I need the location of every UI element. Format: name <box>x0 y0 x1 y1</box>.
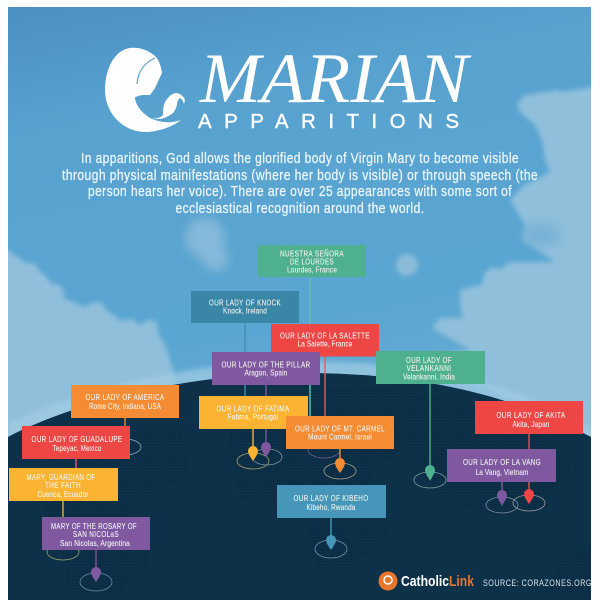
label: Fatima <box>199 396 308 429</box>
cloud: left <box>8 248 176 437</box>
intro paragraph <box>62 151 538 217</box>
label: San Nicolas: San Nicolas, Argentina <box>60 539 130 548</box>
label: Lourdes <box>258 245 366 277</box>
label: Guadalupe: Tepeyac, Mexico <box>52 444 102 453</box>
label: La Salette: OUR LADY OF LA SALETTE <box>280 332 370 340</box>
label: Pillar: Aragon, Spain <box>244 368 288 378</box>
label: Kibeho: Kibeho, Rwanda <box>306 503 356 512</box>
label: Pillar <box>212 352 320 385</box>
label: Guardian of the Faith: THE FAITH <box>45 481 81 490</box>
label: Guardian of the Faith: Cuenca, Ecuador <box>38 490 89 499</box>
label: Knock: OUR LADY OF KNOCK <box>209 298 281 308</box>
logo: Mary and child <box>105 48 185 132</box>
label: La Vang <box>447 449 556 482</box>
label: Lourdes: NUESTRA SEÑORA <box>280 250 344 258</box>
CatholicLink logo: CatholicLink <box>401 573 475 590</box>
CatholicLink logo <box>378 572 475 590</box>
intro paragraph: ecclesiastical recognition around the world. <box>176 201 424 217</box>
label: America: OUR LADY OF AMERICA <box>86 393 165 402</box>
title: MARIAN: MARIAN <box>199 40 472 118</box>
label: La Salette <box>271 324 379 356</box>
label: Knock <box>191 291 299 323</box>
label: Akita: OUR LADY OF AKITA <box>496 411 566 420</box>
label: Guadalupe: OUR LADY OF GUADALUPE <box>32 435 122 444</box>
map pins <box>91 442 534 582</box>
label: Akita: Akita, Japan <box>512 420 550 429</box>
location rings <box>47 439 545 591</box>
background: sky with clouds <box>8 7 591 437</box>
label: Pillar: OUR LADY OF THE PILLAR <box>222 360 310 370</box>
cloud shadow patch <box>520 223 560 247</box>
cloud: small right <box>396 254 418 276</box>
earth with dotted map <box>8 373 600 600</box>
label: Fatima: Fatima, Portugal <box>228 412 279 422</box>
label: La Vang: OUR LADY OF LA VANG <box>463 458 541 467</box>
label: Guadalupe <box>22 426 130 459</box>
label: Guardian of the Faith: MARY, GUARDIAN OF <box>26 473 96 482</box>
label: Kibeho: OUR LADY OF KIBEHO <box>294 494 368 503</box>
label: Velankanni <box>376 351 485 384</box>
label: America <box>71 385 179 418</box>
atmosphere glow <box>8 359 590 436</box>
label: Mt. Carmel: Mount Carmel, Israel <box>308 432 372 442</box>
label: Lourdes: DE LOURDES <box>290 258 334 266</box>
label: San Nicolas <box>42 517 150 550</box>
label: La Salette: La Salette, France <box>298 340 353 348</box>
cloud: right <box>432 85 591 437</box>
label: America: Rome City, Indiana, USA <box>89 402 161 411</box>
label: San Nicolas: SAN NICOLaS <box>73 530 119 539</box>
label: Lourdes: Lourdes, France <box>287 266 337 274</box>
label: Guardian of the Faith <box>9 468 118 501</box>
label: Velankanni: VELANKANNI <box>406 364 452 373</box>
label: Velankanni: OUR LADY OF <box>406 356 452 365</box>
intro paragraph: In apparitions, God allows the glorified body of Virgin Mary to become visible <box>81 151 519 167</box>
label: San Nicolas: MARY OF THE ROSARY OF <box>51 522 137 531</box>
label: Akita <box>475 401 583 434</box>
label: Knock: Knock, Ireland <box>223 306 267 316</box>
label: Kibeho <box>277 485 386 518</box>
label: Velankanni: Velankanni, India <box>403 372 455 382</box>
label: La Vang: La Vang, Vietnam <box>476 468 529 477</box>
subtitle: APPARITIONS: APPARITIONS <box>198 110 459 133</box>
label: Fatima: OUR LADY OF FATIMA <box>216 404 290 414</box>
connector lines <box>63 277 529 568</box>
intro paragraph: person hears her voice). There are over 25 appearances with some sort of <box>88 184 512 200</box>
label: Mt. Carmel <box>286 416 394 449</box>
cloud: small centre <box>185 218 228 271</box>
label: Mt. Carmel: OUR LADY OF MT. CARMEL <box>295 424 385 434</box>
